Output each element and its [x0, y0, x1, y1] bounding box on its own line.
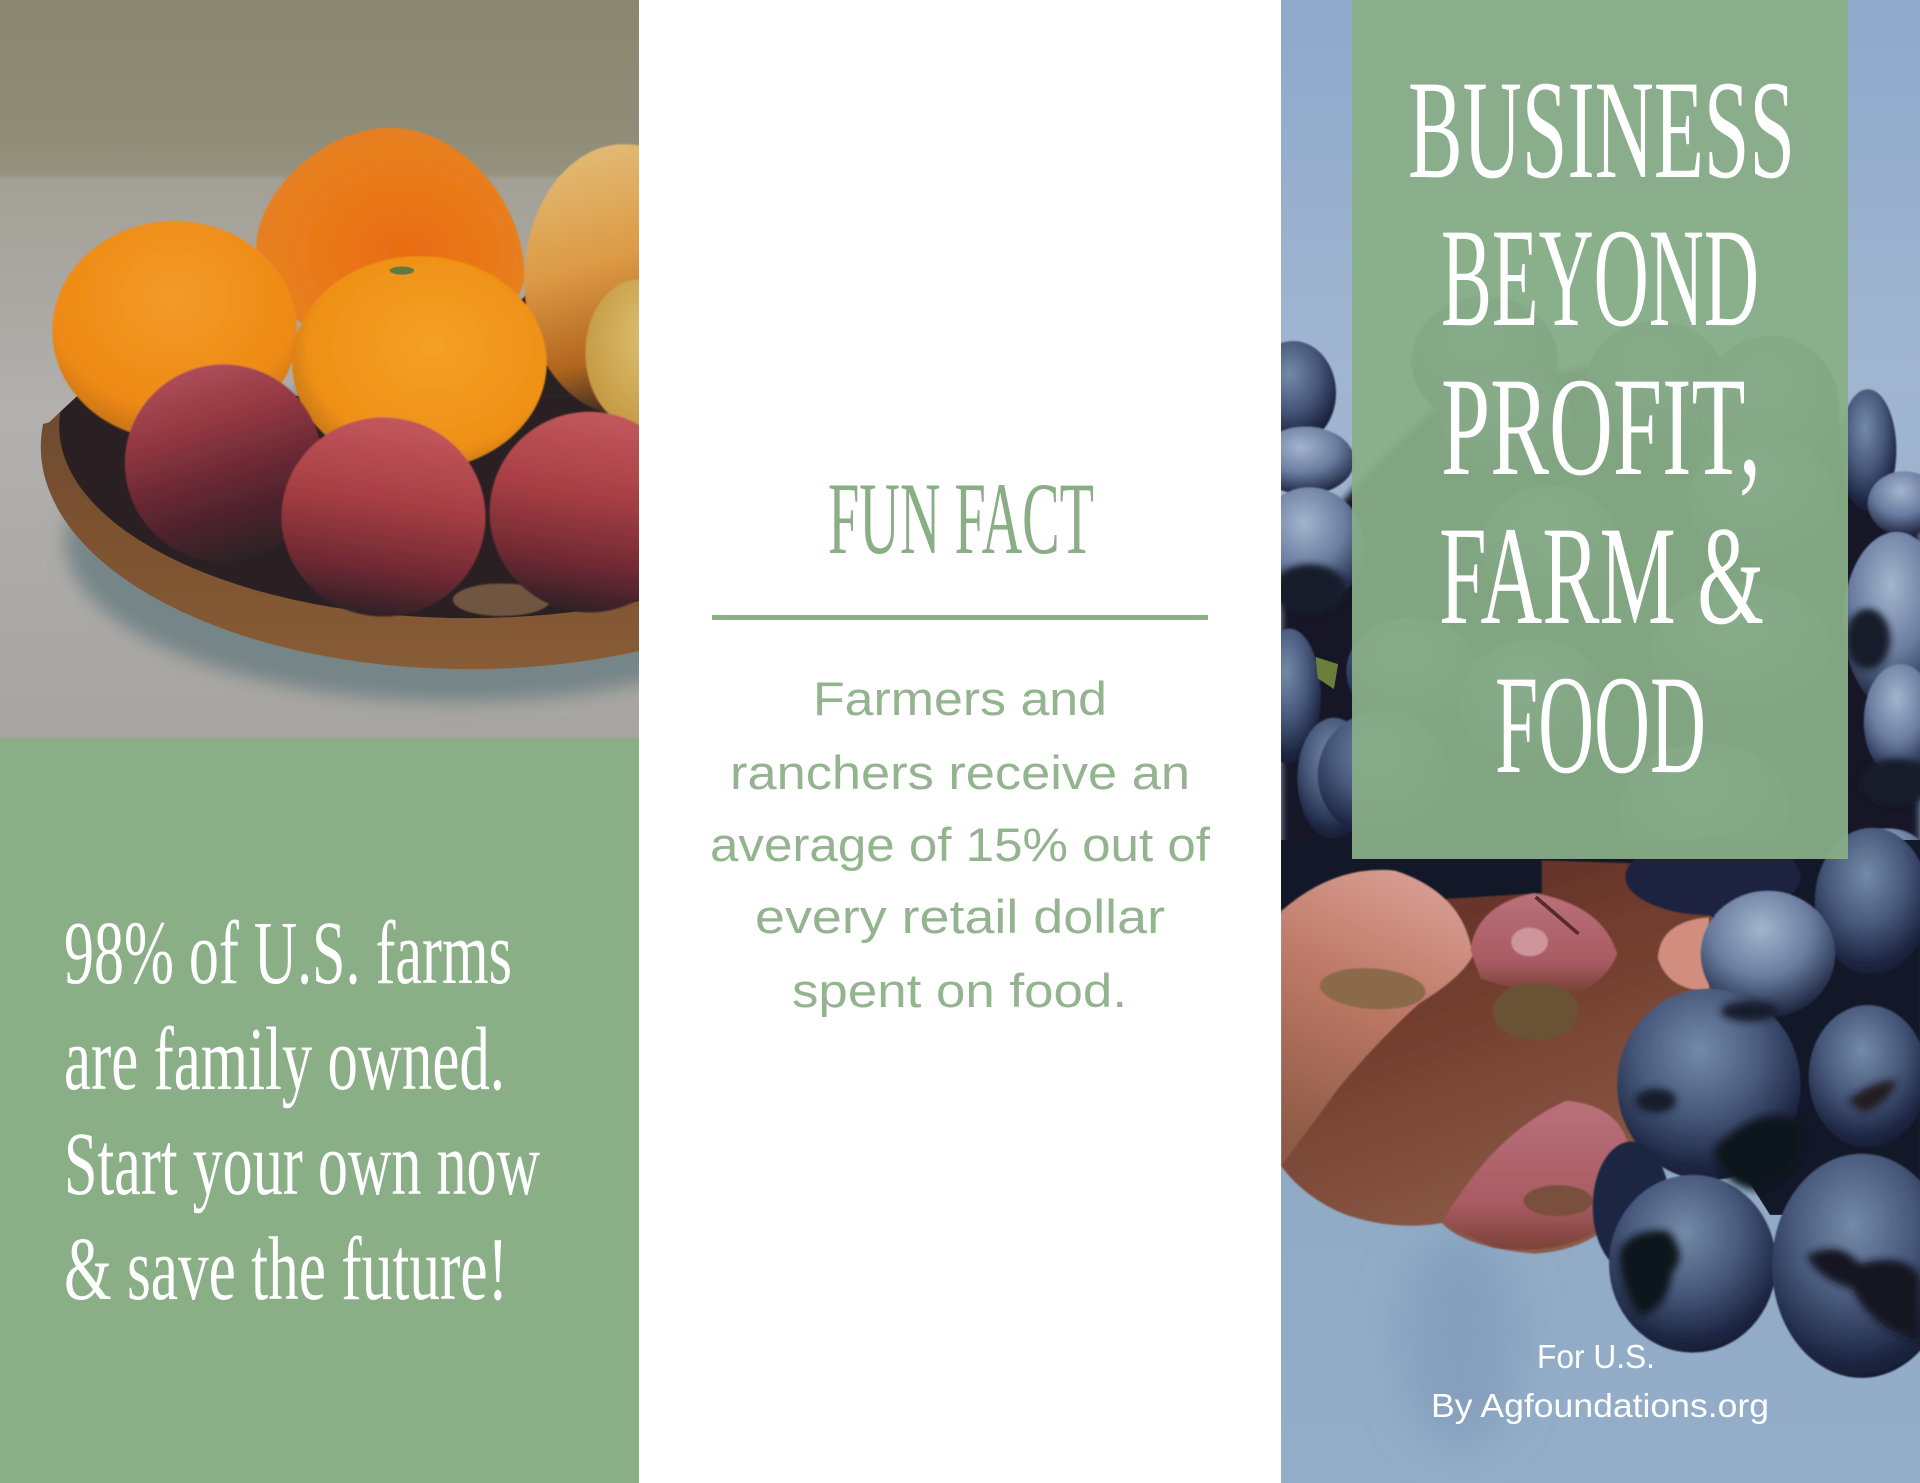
panel: title box [1352, 0, 1848, 859]
text: fun fact body: ranchers receive an [730, 746, 1190, 799]
text: fun fact body: average of 15% out of [710, 818, 1211, 871]
panel: fruit bowl photo [0, 0, 639, 738]
heading: main title: FOOD [1495, 647, 1706, 803]
heading: fun fact: FUN FACT [828, 462, 1094, 576]
text: fun fact body: every retail dollar [755, 890, 1165, 943]
panel: grapes in hand photo [1250, 0, 1920, 1483]
hand holding grapes [1281, 828, 1920, 1378]
text: credit line: By Agfoundations.org [1431, 1387, 1769, 1424]
text: credit line [1431, 1338, 1769, 1424]
text: fun fact body: spent on food. [792, 964, 1127, 1017]
text: fun fact body [710, 672, 1211, 1017]
text: fun fact body: Farmers and [813, 672, 1107, 725]
text: family farms statement: Start your own now [64, 1115, 540, 1214]
text: family farms statement: are family owned. [64, 1010, 505, 1109]
heading: main title [1408, 52, 1795, 803]
text: family farms statement: & save the future! [64, 1220, 508, 1319]
panel: fun fact [639, 0, 1281, 1483]
text: family farms statement [64, 904, 540, 1319]
upper grape cluster [1281, 340, 1920, 840]
panel: green family farm callout [0, 738, 639, 1483]
text: family farms statement: 98% of U.S. farms [64, 904, 512, 1003]
text: credit line: For U.S. [1537, 1338, 1655, 1375]
